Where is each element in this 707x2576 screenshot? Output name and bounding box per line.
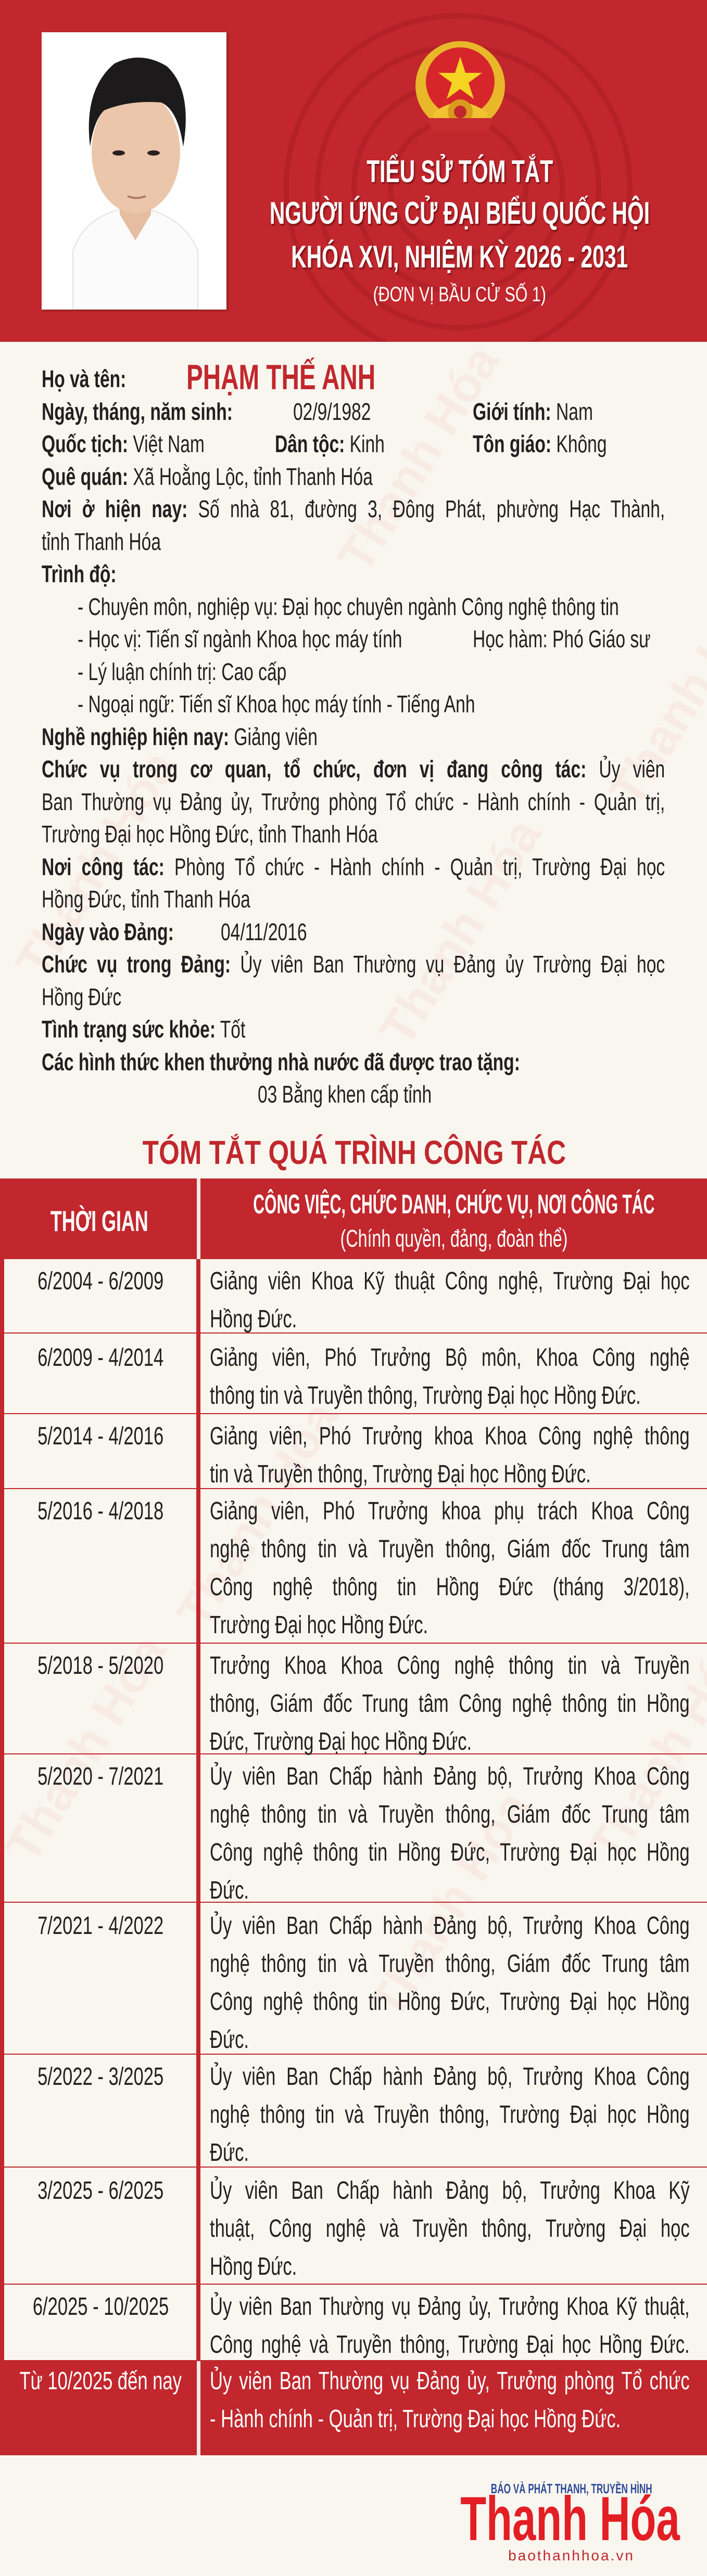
row 11 (current): Ủy viên Ban Thường vụ Đảng ủy, Trưởng phòng Tổ chức <box>210 2367 690 2395</box>
watermarks: Thanh Hóa <box>328 342 510 581</box>
row 9: thuật, Công nghệ và Truyền thông, Trường Đại học <box>210 2215 690 2242</box>
panel: personal information: Hồng Đức <box>42 983 121 1010</box>
title: (ĐƠN VỊ BẦU CỬ SỐ 1) <box>373 283 546 306</box>
row 4: Trường Đại học Hồng Đức. <box>210 1611 428 1639</box>
panel: personal information: Giới tính: Nam <box>473 398 593 425</box>
logo tagline: BÁO VÀ PHÁT THANH, TRUYỀN HÌNH <box>491 2481 652 2496</box>
row 2: Giảng viên, Phó Trưởng Bộ môn, Khoa Công nghệ <box>210 1344 690 1372</box>
party info: Ngày vào Đảng: <box>42 918 174 945</box>
panel: personal information: PHẠM THẾ ANH <box>186 357 375 397</box>
row 6: Công nghệ thông tin Hồng Đức, Trường Đại học Hồng <box>210 1839 690 1866</box>
row 5: 5/2018 - 5/2020 <box>37 1652 163 1680</box>
row 7: Đức. <box>210 2026 249 2054</box>
panel: personal information: - Chuyên môn, nghiệp vụ: Đại học chuyên ngành Công nghệ thông tin <box>78 593 619 620</box>
panel: personal information: Học hàm: Phó Giáo sư <box>473 625 651 652</box>
panel: personal information: Các hình thức khen thưởng nhà nước đã được trao tặng: <box>42 1048 520 1075</box>
panel: personal information: - Ngoại ngữ: Tiến sĩ Khoa học máy tính - Tiếng Anh <box>78 690 475 717</box>
row 4: nghệ thông tin và Truyền thông, Giám đốc Trung tâm <box>210 1535 690 1563</box>
panel: personal information: Dân tộc: Kinh <box>275 430 385 457</box>
row 9: 3/2025 - 6/2025 <box>37 2177 163 2205</box>
table: work history <box>0 1178 707 2455</box>
row 6 <box>0 1754 707 1903</box>
panel: personal information: 03 Bằng khen cấp tỉnh <box>258 1081 432 1108</box>
row 11 (current) <box>0 2361 707 2455</box>
row 1: Giảng viên Khoa Kỹ thuật Công nghệ, Trường Đại học <box>210 1267 690 1295</box>
row 5: thông, Giám đốc Trung tâm Công nghệ thông tin Hồng <box>210 1690 690 1718</box>
panel: personal information: Nơi công tác: Phòng Tổ chức - Hành chính - Quản trị, Trường Đại học <box>42 853 665 880</box>
table borders <box>0 1259 4 2361</box>
row 7: Công nghệ thông tin Hồng Đức, Trường Đại học Hồng <box>210 1988 690 2016</box>
heading: work history: TÓM TẮT QUÁ TRÌNH CÔNG TÁC <box>142 1134 566 1171</box>
title: KHÓA XVI, NHIỆM KỲ 2026 - 2031 <box>291 239 628 274</box>
panel: personal information: Chức vụ trong cơ quan, tổ chức, đơn vị đang công tác: Ủy viên <box>42 755 665 783</box>
occupation & positions: Nghề nghiệp hiện nay: Giảng viên <box>42 723 318 750</box>
row 6: 5/2020 - 7/2021 <box>37 1763 163 1790</box>
row 5: Đức, Trường Đại học Hồng Đức. <box>210 1728 472 1755</box>
row 1: Hồng Đức. <box>210 1305 297 1333</box>
panel: personal information: Chức vụ trong Đảng: Ủy viên Ban Thường vụ Đảng ủy Trường Đại học <box>42 951 665 978</box>
row 6: Đức. <box>210 1877 249 1904</box>
row 7: 7/2021 - 4/2022 <box>37 1912 163 1940</box>
row 7: nghệ thông tin và Truyền thông, Giám đốc Trung tâm <box>210 1950 690 1978</box>
row 7 <box>0 1903 707 2055</box>
row 11 (current): Từ 10/2025 đến nay <box>19 2367 182 2395</box>
panel: personal information: - Học vị: Tiến sĩ ngành Khoa học máy tính <box>78 625 402 652</box>
row 8 <box>0 2055 707 2168</box>
row 9 <box>0 2168 707 2285</box>
name row: Họ và tên: <box>42 365 126 392</box>
row 10: 6/2025 - 10/2025 <box>32 2293 169 2321</box>
row 3 <box>0 1414 707 1489</box>
panel: personal information: Tôn giáo: Không <box>473 430 607 457</box>
row 2: 6/2009 - 4/2014 <box>37 1344 163 1372</box>
header band <box>0 0 707 342</box>
footer logo <box>460 2481 680 2564</box>
row 10: Công nghệ và Truyền thông, Trường Đại học Hồng Đức. <box>210 2331 690 2359</box>
row 9: Ủy viên Ban Chấp hành Đảng bộ, Trưởng Khoa Kỹ <box>210 2177 690 2205</box>
panel: personal information: 02/9/1982 <box>293 398 371 425</box>
photo <box>42 32 226 310</box>
row 1 <box>0 1259 707 1334</box>
title: TIỂU SỬ TÓM TẮT <box>367 154 553 189</box>
panel: personal information: 04/11/2016 <box>221 918 307 945</box>
panel: personal information: - Lý luận chính trị: Cao cấp <box>78 658 286 685</box>
row 7: Ủy viên Ban Chấp hành Đảng bộ, Trưởng Khoa Công <box>210 1912 690 1940</box>
watermarks: Thanh Hóa <box>167 1392 349 1637</box>
row 3: tin và Truyền thông, Trường Đại học Hồng Đức. <box>210 1460 591 1488</box>
watermarks: Thanh Hóa <box>0 1626 177 1872</box>
row 3: Giảng viên, Phó Trưởng khoa Khoa Công nghệ thông <box>210 1422 690 1450</box>
watermarks: Thanh Hóa <box>5 741 187 987</box>
table header: THỜI GIAN <box>51 1204 148 1237</box>
table header <box>0 1178 707 1259</box>
logo url: baothanhhoa.vn <box>508 2547 635 2564</box>
row 4: 5/2016 - 4/2018 <box>37 1497 163 1525</box>
row 8: 5/2022 - 3/2025 <box>37 2063 163 2091</box>
row 1: 6/2004 - 6/2009 <box>37 1267 163 1295</box>
row 2 <box>0 1334 707 1414</box>
panel: personal information: tỉnh Thanh Hóa <box>42 528 161 555</box>
table header: (Chính quyền, đảng, đoàn thể) <box>340 1225 567 1252</box>
title: NGƯỜI ỨNG CỬ ĐẠI BIỂU QUỐC HỘI <box>270 196 650 230</box>
row 11 (current): - Hành chính - Quản trị, Trường Đại học Hồng Đức. <box>210 2405 621 2433</box>
panel: personal information: Hồng Đức, tỉnh Thanh Hóa <box>42 886 250 913</box>
row 3: 5/2014 - 4/2016 <box>37 1422 163 1450</box>
nationality / ethnicity / religion: Quốc tịch: Việt Nam <box>42 430 205 457</box>
panel: personal information: Trường Đại học Hồng Đức, tỉnh Thanh Hóa <box>42 821 378 848</box>
education: Trình độ: <box>42 560 117 587</box>
watermarks: Thanh Hóa <box>370 809 552 1055</box>
panel: personal information: Tình trạng sức khỏe: Tốt <box>42 1016 245 1043</box>
logo wordmark: Thanh Hóa <box>460 2484 680 2554</box>
row 5 <box>0 1644 707 1754</box>
row 2: thông tin và Truyền thông, Trường Đại học Hồng Đức. <box>210 1382 641 1409</box>
row 6: nghệ thông tin và Truyền thông, Giám đốc Trung tâm <box>210 1801 690 1828</box>
row 5: Trưởng Khoa Khoa Công nghệ thông tin và Truyền <box>210 1652 690 1680</box>
title <box>270 154 650 306</box>
row 10 <box>0 2285 707 2361</box>
row 8: Đức. <box>210 2139 249 2167</box>
hometown & residence: Quê quán: Xã Hoằng Lộc, tỉnh Thanh Hóa <box>42 463 373 490</box>
row 4 <box>0 1489 707 1644</box>
row 8: Ủy viên Ban Chấp hành Đảng bộ, Trưởng Khoa Công <box>210 2063 690 2091</box>
row 6: Ủy viên Ban Chấp hành Đảng bộ, Trưởng Khoa Công <box>210 1763 690 1790</box>
watermarks: Thanh Hóa <box>359 1782 541 2028</box>
birth date / gender: Ngày, tháng, năm sinh: <box>42 398 233 425</box>
table header: CÔNG VIỆC, CHỨC DANH, CHỨC VỤ, NƠI CÔNG TÁC <box>253 1189 655 1220</box>
panel: personal information <box>42 357 665 1108</box>
row 8: nghệ thông tin và Truyền thông, Trường Đại học Hồng <box>210 2101 690 2129</box>
row 9: Hồng Đức. <box>210 2253 297 2280</box>
row 4: Công nghệ thông tin Hồng Đức (tháng 3/2018), <box>210 1573 690 1601</box>
drum pattern background <box>284 13 633 342</box>
row 4: Giảng viên, Phó Trưởng khoa phụ trách Khoa Công <box>210 1497 690 1525</box>
icon: national emblem <box>415 41 505 130</box>
panel: personal information: Ban Thường vụ Đảng ủy, Trưởng phòng Tổ chức - Hành chính - Quản trị, <box>42 788 665 815</box>
panel: personal information: Nơi ở hiện nay: Số nhà 81, đường 3, Đông Phát, phường Hạc Thành, <box>42 495 665 522</box>
row 10: Ủy viên Ban Thường vụ Đảng ủy, Trưởng Khoa Kỹ thuật, <box>210 2293 690 2321</box>
